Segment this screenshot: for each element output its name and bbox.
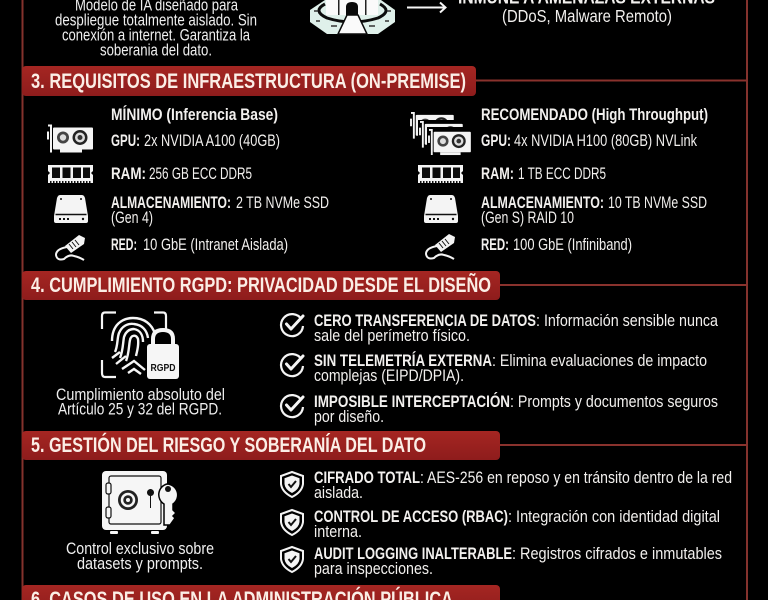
item: audit logging: : Registros cifrados e inmutables [512, 545, 722, 563]
item: sin telemetria [281, 351, 707, 385]
ram spec [111, 165, 252, 183]
storage spec: ALMACENAMIENTO: [481, 194, 604, 212]
text block: inmune a amenazas [458, 0, 715, 26]
text block: modelo aislado: despliegue totalmente aislado. Sin [55, 12, 257, 30]
ram spec: RAM: [481, 165, 514, 183]
caption: cumplimiento [56, 386, 225, 418]
gpu spec [111, 132, 280, 150]
gpu spec: GPU: [481, 132, 511, 150]
ram spec [481, 165, 606, 183]
icon: ram [418, 165, 463, 183]
storage spec [111, 194, 329, 227]
item: imposible interceptacion: IMPOSIBLE INTERCEPTACIÓN [314, 392, 510, 411]
item: cero transferencia: CERO TRANSFERENCIA DE DATOS [314, 312, 536, 330]
icon: network cable [56, 235, 85, 260]
heading: section 3: 3. REQUISITOS DE INFRAESTRUCTURA (ON-PREMISE) [31, 69, 466, 93]
item: sin telemetria: complejas (EIPD/DPIA). [314, 367, 464, 385]
item: audit logging: AUDIT LOGGING INALTERABLE [314, 545, 512, 563]
network spec: RED: [111, 236, 137, 254]
heading: section 5: 5. GESTIÓN DEL RIESGO Y SOBERANÍA DEL DATO [31, 432, 426, 457]
storage spec [481, 194, 707, 227]
caption: cumplimiento: Cumplimiento absoluto del [56, 386, 225, 404]
text block: modelo aislado: soberania del dato. [100, 42, 212, 60]
storage spec: 10 TB NVMe SSD [608, 194, 707, 212]
icon: fingerprint and RGPD lock [102, 312, 179, 379]
item: cifrado total: CIFRADO TOTAL [314, 469, 420, 487]
item: control de acceso [281, 508, 720, 541]
item: sin telemetria: SIN TELEMETRÍA EXTERNA [314, 351, 492, 370]
icon: fingerprint and RGPD lock: RGPD [150, 362, 176, 374]
icon: storage [54, 195, 88, 223]
caption: control exclusivo: datasets y prompts. [77, 555, 203, 573]
item: audit logging [281, 545, 722, 578]
checklist: RGPD [281, 312, 719, 426]
network spec [111, 236, 288, 254]
network spec: RED: [481, 236, 509, 254]
network spec: 100 GbE (Infiniband) [513, 236, 632, 254]
text block: modelo aislado [55, 0, 257, 60]
panel: requisito recomendado [410, 105, 708, 259]
panel: requisito minimo [47, 105, 329, 260]
item: imposible interceptacion: por diseño. [314, 408, 384, 426]
item: cifrado total: aislada. [314, 484, 363, 502]
caption: control exclusivo [66, 540, 214, 573]
item: control de acceso: : Integración con identidad digital [508, 508, 720, 526]
icon: storage [424, 195, 458, 223]
gpu spec [481, 132, 698, 150]
checklist: riesgo [281, 469, 732, 578]
item: control de acceso: interna. [314, 523, 362, 541]
item: imposible interceptacion: : Prompts y documentos seguros [510, 393, 718, 411]
icon: ram [48, 165, 93, 183]
icon: fortress with moat [310, 0, 395, 34]
item: sin telemetria: : Elimina evaluaciones de impacto [492, 352, 707, 370]
item: imposible interceptacion [281, 392, 718, 426]
arrow [407, 2, 446, 12]
storage spec: (Gen 4) [111, 209, 153, 227]
item: cero transferencia: : Información sensible nunca [536, 312, 719, 330]
item: audit logging: para inspecciones. [314, 560, 433, 578]
text block: inmune a amenazas: (DDoS, Malware Remoto) [502, 6, 672, 26]
storage spec: ALMACENAMIENTO: [111, 194, 231, 212]
recommended title: RECOMENDADO (High Throughput) [481, 105, 708, 124]
item: control de acceso: CONTROL DE ACCESO (RBAC) [314, 508, 508, 526]
gpu spec: GPU: [111, 132, 140, 150]
heading: section 3 [22, 66, 476, 96]
storage spec: 2 TB NVMe SSD [236, 194, 329, 212]
icon: network cable [426, 234, 455, 259]
text block: modelo aislado: conexión a internet. Garantiza la [62, 26, 251, 44]
heading: section 4: 4. CUMPLIMIENTO RGPD: PRIVACIDAD DESDE EL DISEÑO [31, 272, 491, 297]
icon: safe with key [102, 471, 178, 534]
minimum title: MÍNIMO (Inferencia Base) [111, 105, 278, 124]
item: cero transferencia: sale del perímetro físico. [314, 327, 470, 345]
icon: gpu stack [410, 112, 472, 157]
network spec [481, 236, 632, 254]
gpu spec: 4x NVIDIA H100 (80GB) NVLink [514, 132, 698, 150]
ram spec: RAM: [111, 165, 146, 183]
caption: cumplimiento: Artículo 25 y 32 del RGPD. [58, 400, 222, 418]
heading: section 4 [22, 271, 500, 300]
item: cifrado total [281, 469, 732, 502]
ram spec: 1 TB ECC DDR5 [518, 165, 606, 183]
item: cero transferencia [281, 312, 719, 345]
storage spec: (Gen S) RAID 10 [481, 209, 574, 227]
network spec: 10 GbE (Intranet Aislada) [143, 236, 288, 254]
caption: control exclusivo: Control exclusivo sobre [66, 540, 214, 558]
ram spec: 256 GB ECC DDR5 [149, 165, 252, 183]
icon: gpu [47, 124, 93, 152]
gpu spec: 2x NVIDIA A100 (40GB) [144, 132, 280, 150]
